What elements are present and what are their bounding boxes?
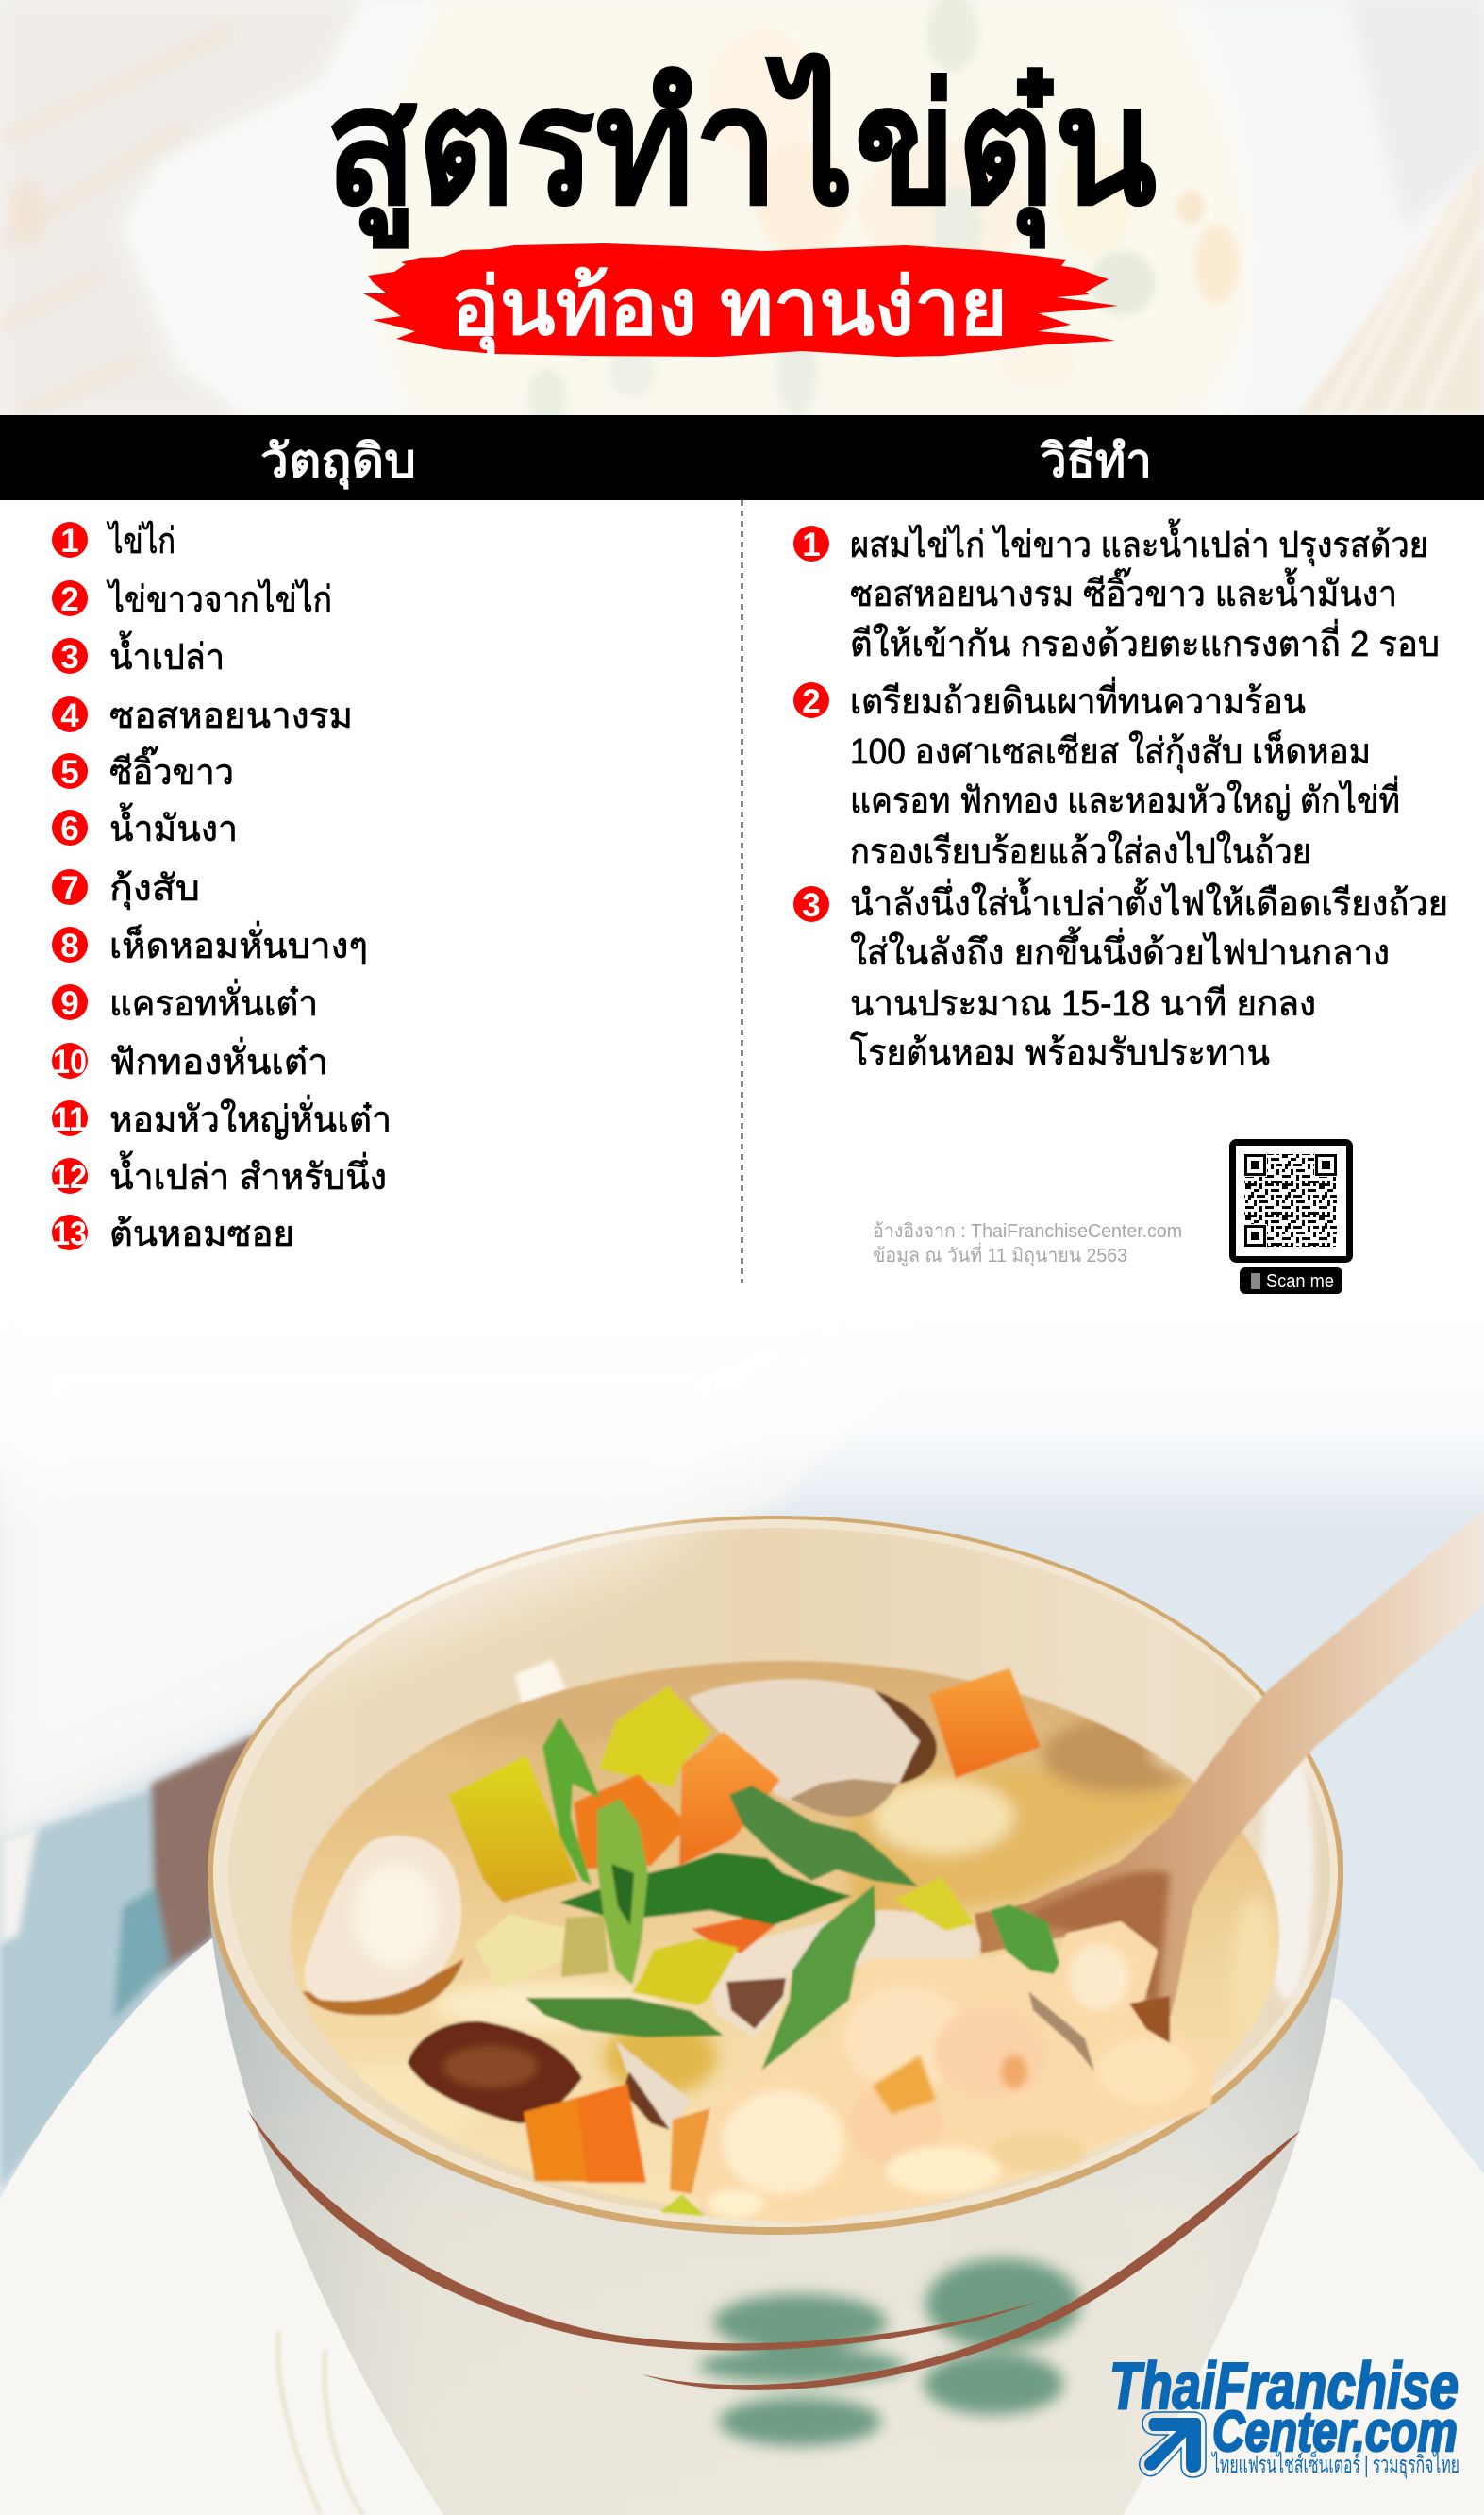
step 2: แครอท ฟักทอง และหอมหัวใหญ่ ตักไข่ที่ <box>850 776 1400 821</box>
ingredients list: 1 <box>60 523 79 560</box>
ingredients list: เห็ดหอมหั่นบางๆ <box>109 921 368 966</box>
ingredients list: 3 <box>60 639 79 676</box>
ingredients list: 11 <box>53 1101 87 1138</box>
ingredients list: 13 <box>53 1216 87 1252</box>
glaze green blotches <box>698 2258 1080 2446</box>
source credit: ข้อมูล ณ วันที่ 11 มิถุนายน 2563 <box>873 1242 1127 1267</box>
step 1: ซอสหอยนางรม ซีอิ๊วขาว และน้ำมันงา <box>850 567 1397 614</box>
custard lights and shadows <box>355 1718 1277 2133</box>
section header bar <box>0 415 1484 500</box>
bowl rim <box>208 1516 1343 2235</box>
ingredients list: น้ำเปล่า สำหรับนึ่ง <box>109 1150 387 1198</box>
top fade to white <box>0 1302 1484 1529</box>
ingredients list: ไข่ไก่ <box>107 521 175 562</box>
scan me label <box>1240 1267 1342 1294</box>
subtitle on red brush <box>363 243 1118 357</box>
QR code <box>1232 1142 1349 1259</box>
title: สูตรทำไข่ตุ๋น <box>325 52 1157 249</box>
ingredients list: ต้นหอมซอย <box>109 1215 294 1254</box>
step 3: นานประมาณ 15-18 นาที ยกลง <box>850 984 1316 1024</box>
table boards on left <box>0 1732 264 2189</box>
subtitle on red brush: อุ่นท้อง ทานง่าย <box>451 262 1008 357</box>
ingredients list: หอมหัวใหญ่หั่นเต๋า <box>109 1095 392 1140</box>
ingredients list: น้ำมันงา <box>109 802 238 849</box>
step 1 <box>793 518 1440 664</box>
ingredients list: 5 <box>60 754 79 791</box>
ingredients list: 10 <box>53 1044 87 1081</box>
step 2: กรองเรียบร้อยแล้วใส่ลงไปในถ้วย <box>850 831 1311 872</box>
bowl body <box>208 1850 1343 2515</box>
step 3: ใส่ในลังถึง ยกขึ้นนึ่งด้วยไฟปานกลาง <box>850 926 1390 973</box>
step 3: โรยต้นหอม พร้อมรับประทาน <box>850 1031 1270 1073</box>
section header bar: วิธีทำ <box>1040 436 1152 487</box>
ingredients list: 9 <box>60 985 79 1022</box>
ingredients list: ซอสหอยนางรม <box>109 696 353 736</box>
ingredients list <box>52 521 392 1254</box>
saucer plate <box>0 1935 1484 2515</box>
photo fade at top left <box>0 1321 849 1793</box>
ingredients list: 8 <box>60 928 79 964</box>
red brush stroke <box>363 243 1118 357</box>
ingredients list: 2 <box>60 581 79 618</box>
ingredients list: แครอทหั่นเต๋า <box>109 979 318 1024</box>
white cloth <box>0 1321 943 1840</box>
step 1: ผสมไข่ไก่ ไข่ขาว และน้ำเปล่า ปรุงรสด้วย <box>850 518 1428 566</box>
egg custard bowl <box>208 1510 1484 2515</box>
step 3: 3 <box>802 887 821 924</box>
spoon <box>975 1510 1484 2043</box>
vegetable cubes <box>448 1668 1041 2216</box>
brown glaze stripes <box>247 2109 1300 2390</box>
ingredients list: 6 <box>60 811 79 847</box>
step 2: 100 องศาเซลเซียส ใส่กุ้งสับ เห็ดหอม <box>850 729 1371 773</box>
ingredients list: กุ้งสับ <box>109 869 200 910</box>
ingredients list: ฟักทองหั่นเต๋า <box>109 1037 328 1082</box>
dish photo background <box>0 1302 1484 2515</box>
step 3: นำลังนึ่งใส่น้ำเปล่าตั้งไฟให้เดือดเรียงถ้วย <box>850 877 1448 924</box>
step 3 <box>793 877 1448 1073</box>
ThaiFranchiseCenter logo <box>1109 2349 1459 2479</box>
source credit <box>873 1221 1182 1267</box>
section header bar: วัตถุดิบ <box>260 436 416 490</box>
custard surface <box>291 1661 1279 2212</box>
ingredients list: 12 <box>53 1159 87 1196</box>
ingredients list: ซีอิ๊วขาว <box>109 746 234 793</box>
mushrooms <box>302 1679 981 2130</box>
ingredients list: 4 <box>60 697 79 734</box>
ingredients list: ไข่ขาวจากไข่ไก่ <box>106 579 332 620</box>
column divider <box>742 500 743 1283</box>
step 2: เตรียมถ้วยดินเผาที่ทนความร้อน <box>850 677 1306 722</box>
ingredients list: น้ำเปล่า <box>109 630 225 678</box>
ingredients list: 7 <box>60 870 79 907</box>
step 2: 2 <box>802 683 821 720</box>
step 2 <box>793 677 1400 872</box>
custard and toppings <box>291 1510 1484 2220</box>
spring onion slices <box>525 1717 1059 2071</box>
icon: arrow <box>1140 2412 1206 2477</box>
step 1: 1 <box>802 527 821 563</box>
source credit: อ้างอิงจาก : ThaiFranchiseCenter.com <box>873 1221 1182 1242</box>
header background photo (faded bowl) <box>0 0 1484 425</box>
scan me label: Scan me <box>1266 1271 1334 1292</box>
step 1: ตีให้เข้ากัน กรองด้วยตะแกรงตาถี่ 2 รอบ <box>850 619 1440 664</box>
scooped egg <box>696 1925 1209 2220</box>
cooking steps <box>793 518 1448 1073</box>
